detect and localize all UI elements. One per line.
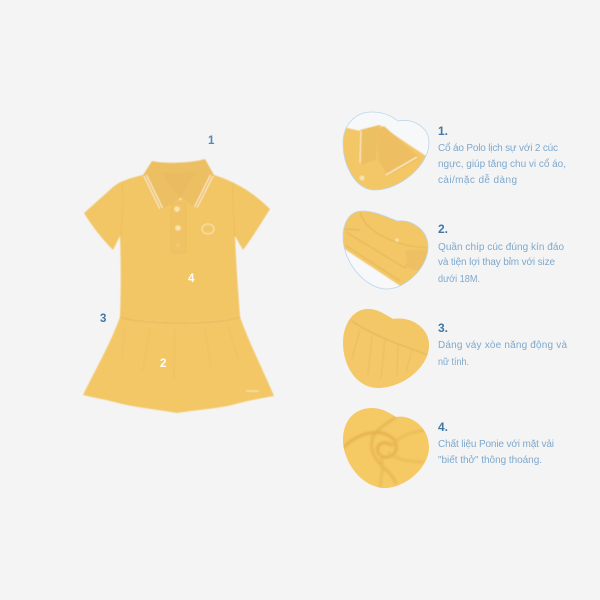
heart photo 1: collar	[342, 112, 430, 190]
feature 4 text	[438, 420, 554, 466]
chest logo	[202, 224, 214, 234]
feature 3 text	[438, 321, 567, 368]
feature 2 text: 2.	[438, 222, 448, 236]
heart photo 4: fabric swirl	[343, 408, 429, 488]
dress illustration	[83, 159, 274, 413]
feature 2 text	[438, 222, 564, 285]
feature 1 text	[438, 124, 566, 186]
number marker 2: 2	[160, 358, 166, 370]
feature 3 text: 3.	[438, 321, 448, 335]
heart photo 2: snap crotch	[342, 210, 428, 290]
feature 3 text: nữ tính.	[438, 357, 469, 368]
collar	[143, 159, 214, 210]
dress bodice and sleeves	[84, 175, 270, 322]
feature 4 text: Chất liệu Ponie với mặt vải	[438, 438, 554, 450]
hem logo	[246, 390, 259, 392]
feature 4 text: 4.	[438, 420, 448, 434]
feature 1 text: 1.	[438, 124, 448, 138]
feature 2 text: Quần chíp cúc đúng kín đáo	[438, 241, 564, 253]
feature 3 text: Dáng váy xòe năng động và	[438, 340, 567, 351]
feature 1 text: cài/mặc dễ dàng	[438, 173, 517, 186]
dress skirt	[83, 317, 274, 413]
number marker 1: 1	[208, 135, 215, 147]
feature 2 text: và tiện lợi thay bỉm với size	[438, 256, 555, 268]
feature 1 text: ngực, giúp tăng chu vi cổ áo,	[438, 158, 566, 170]
feature 4 text: "biết thở" thông thoáng.	[438, 454, 542, 466]
button placket	[171, 203, 186, 253]
feature 1 text: Cổ áo Polo lịch sự với 2 cúc	[438, 142, 558, 154]
number marker 3: 3	[100, 313, 106, 325]
heart photo 3: gathered skirt	[343, 309, 429, 388]
feature 2 text: dưới 18M.	[438, 274, 480, 285]
number marker 4: 4	[188, 273, 195, 285]
